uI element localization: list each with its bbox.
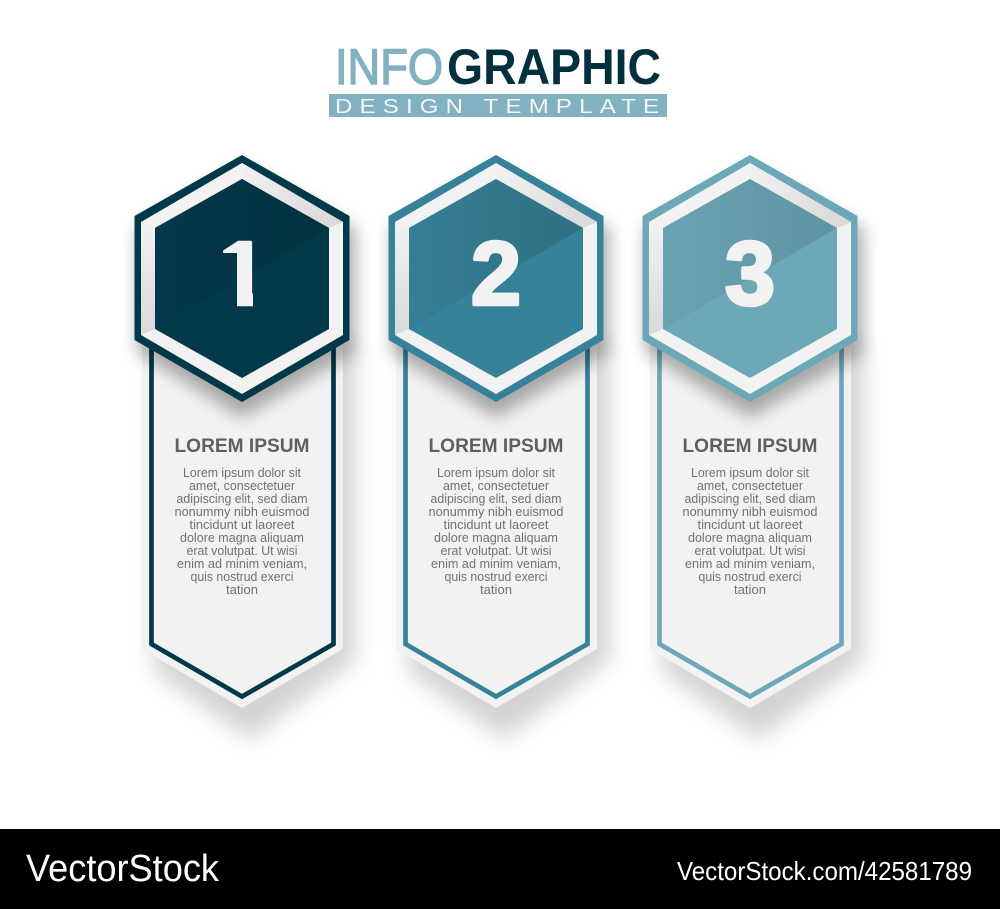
card body text: tation bbox=[226, 583, 258, 597]
rim shade: left bbox=[649, 222, 663, 335]
card body text: adipiscing elit, sed diam bbox=[684, 492, 816, 506]
card body text: tincidunt ut laoreet bbox=[190, 518, 295, 532]
card body text bbox=[428, 466, 564, 597]
footer bar bbox=[0, 829, 1000, 909]
rim shade: left bbox=[141, 222, 155, 335]
hexagon shadow bbox=[137, 167, 356, 418]
card body text: enim ad minim veniam, bbox=[685, 557, 815, 571]
card body text: adipiscing elit, sed diam bbox=[176, 492, 308, 506]
card body text: dolore magna aliquam bbox=[434, 531, 558, 545]
subtitle bar bbox=[329, 94, 667, 117]
number: 1 bbox=[217, 224, 267, 324]
rim shade: upper right bbox=[750, 163, 851, 228]
hexagon border bbox=[134, 155, 350, 402]
card body text: erat volutpat. Ut wisi bbox=[694, 544, 806, 558]
panel: step 2 bbox=[388, 155, 610, 740]
hexagon diagonal shade bbox=[663, 179, 837, 329]
card body text: erat volutpat. Ut wisi bbox=[440, 544, 552, 558]
hexagon diagonal shade bbox=[409, 179, 583, 329]
card body text: nonummy nibh euismod bbox=[682, 505, 818, 519]
rim shade: left bbox=[395, 222, 409, 335]
card shadow bbox=[154, 345, 356, 740]
card body text: amet, consectetuer bbox=[697, 479, 803, 493]
card body text: Lorem ipsum dolor sit bbox=[183, 466, 302, 480]
card outer bbox=[650, 345, 851, 708]
hexagon inner bbox=[155, 179, 329, 378]
footer logo: VectorStock bbox=[26, 848, 220, 890]
card body text: tation bbox=[734, 583, 766, 597]
hexagon shadow bbox=[391, 167, 610, 418]
card body text: adipiscing elit, sed diam bbox=[430, 492, 562, 506]
card body text: quis nostrud exerci bbox=[444, 570, 548, 584]
card outer bbox=[142, 345, 343, 708]
hexagon inner bbox=[409, 179, 583, 378]
card heading: LOREM IPSUM bbox=[428, 435, 564, 457]
footer url: VectorStock.com/42581789 bbox=[677, 856, 972, 886]
number: 3 bbox=[725, 224, 775, 324]
card body text: Lorem ipsum dolor sit bbox=[437, 466, 556, 480]
card body text: nonummy nibh euismod bbox=[428, 505, 564, 519]
hexagon rim bbox=[649, 163, 851, 394]
card outline bbox=[406, 340, 588, 696]
card outline bbox=[152, 340, 334, 696]
card body text: quis nostrud exerci bbox=[698, 570, 802, 584]
card outline bbox=[660, 340, 842, 696]
panel: step 3 bbox=[642, 155, 864, 740]
card body text: dolore magna aliquam bbox=[180, 531, 304, 545]
hexagon border bbox=[642, 155, 858, 402]
hexagon rim bbox=[395, 163, 597, 394]
card body text: Lorem ipsum dolor sit bbox=[691, 466, 810, 480]
card heading: LOREM IPSUM bbox=[174, 435, 310, 457]
card body text bbox=[174, 466, 310, 597]
card body text: dolore magna aliquam bbox=[688, 531, 812, 545]
card body text: amet, consectetuer bbox=[189, 479, 295, 493]
card body text: enim ad minim veniam, bbox=[431, 557, 561, 571]
number: 2 bbox=[471, 224, 521, 324]
card body text: erat volutpat. Ut wisi bbox=[186, 544, 298, 558]
card body text: enim ad minim veniam, bbox=[177, 557, 307, 571]
card shadow bbox=[662, 345, 864, 740]
hexagon border bbox=[388, 155, 604, 402]
card shadow bbox=[408, 345, 610, 740]
card body text: tation bbox=[480, 583, 512, 597]
hexagon rim bbox=[141, 163, 343, 394]
card heading: LOREM IPSUM bbox=[682, 435, 818, 457]
card body text: quis nostrud exerci bbox=[190, 570, 294, 584]
card outer bbox=[396, 345, 597, 708]
subtitle text: DESIGN TEMPLATE bbox=[335, 95, 659, 118]
title word: GRAPHIC: GRAPHIC bbox=[447, 39, 661, 95]
card body text: nonummy nibh euismod bbox=[174, 505, 310, 519]
card body text: amet, consectetuer bbox=[443, 479, 549, 493]
rim shade: upper right bbox=[242, 163, 343, 228]
panel: step 1 bbox=[134, 155, 356, 740]
hexagon inner bbox=[663, 179, 837, 378]
hexagon shadow bbox=[645, 167, 864, 418]
card body text: tincidunt ut laoreet bbox=[698, 518, 803, 532]
card body text bbox=[682, 466, 818, 597]
title bbox=[329, 39, 667, 118]
hexagon diagonal shade bbox=[155, 179, 329, 329]
title word: INFO: INFO bbox=[335, 39, 443, 95]
card body text: tincidunt ut laoreet bbox=[444, 518, 549, 532]
rim shade: upper right bbox=[496, 163, 597, 228]
